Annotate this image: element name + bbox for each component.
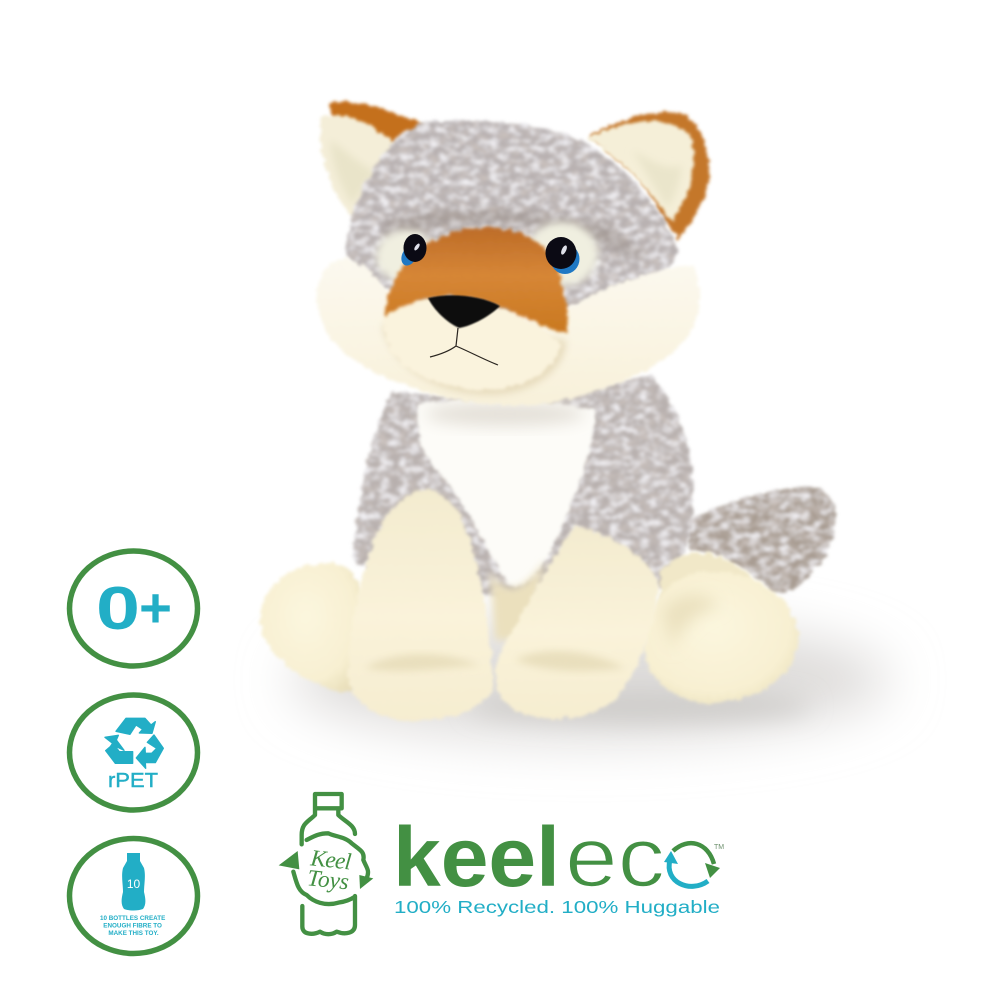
tail: [688, 487, 836, 593]
badge ring: [70, 838, 198, 954]
icon: recycled bottle: [279, 794, 373, 934]
left highlight: [413, 243, 421, 251]
right pupil: [546, 237, 576, 269]
eye patches: [376, 222, 598, 286]
badge: rPET: [70, 695, 198, 810]
muzzle cream: [384, 298, 560, 390]
badge ring: [70, 551, 198, 666]
left eye: [398, 234, 426, 268]
age digit: 0: [96, 575, 140, 642]
body: [352, 375, 693, 600]
ear left: [320, 102, 430, 218]
bottle outline: [293, 794, 368, 934]
tagline: 100% Recycled. 100% Huggable: [394, 897, 720, 917]
ear right: [588, 112, 709, 240]
ear right inner shade: [632, 150, 682, 208]
wordmark ec: ec: [565, 810, 665, 904]
green arc: [673, 843, 714, 864]
bottle caption: 10 BOTTLES CREATE: [100, 915, 165, 922]
blue arc: [669, 860, 708, 886]
ear right back: [590, 112, 709, 240]
ear left front: [320, 115, 404, 218]
badge: ten bottles: [70, 838, 198, 954]
cheeks: [317, 258, 700, 405]
right iris: [550, 244, 580, 274]
right highlight: [560, 245, 568, 255]
right eye patch: [526, 222, 598, 286]
nose: [428, 295, 500, 328]
right haunch: [660, 553, 760, 660]
back foot right: [644, 572, 798, 703]
right arrowhead: [359, 875, 373, 889]
left arrowhead: [279, 851, 299, 869]
mouth: [430, 328, 498, 365]
Keel script: Keel: [308, 845, 353, 875]
right eye: [546, 237, 580, 274]
left iris: [398, 244, 420, 268]
ear left back: [328, 102, 430, 170]
wordmark keel: keel: [393, 810, 560, 904]
left eye patch: [376, 230, 436, 282]
icon: recycling arrows: [105, 718, 163, 768]
icon: bottle: [122, 853, 145, 910]
chest shade under chin: [425, 402, 585, 426]
toe shade right: [515, 651, 625, 671]
centre shadow between legs: [490, 560, 545, 640]
badge ring: [70, 695, 198, 810]
bottle caption: ENOUGH FIBRE TO: [103, 922, 162, 930]
ear left inner shade: [330, 140, 376, 205]
toe shade left: [365, 654, 480, 671]
rPET label: rPET: [108, 770, 158, 792]
blue arrowhead: [664, 851, 678, 864]
badge: age 0+: [70, 551, 198, 666]
front leg right: [496, 525, 658, 718]
green arrowhead: [705, 863, 720, 878]
back foot left: [260, 563, 362, 692]
brow shading: [385, 210, 650, 262]
plush wolf toy: [260, 102, 836, 721]
muzzle shadow: [382, 325, 566, 394]
ear right front: [588, 121, 694, 222]
bottle number: 10: [127, 877, 140, 891]
plus sign: +: [139, 576, 172, 639]
wordmark o as recycling loop: [664, 843, 720, 886]
ground shadow: [290, 620, 890, 740]
trademark: TM: [714, 844, 724, 851]
foot shade right: [662, 594, 720, 650]
bottle caption: MAKE THIS TOY.: [108, 930, 159, 937]
keeleco logo: [279, 794, 724, 934]
chest: [417, 399, 596, 586]
Toys script: Toys: [306, 865, 350, 895]
front leg left: [348, 490, 493, 721]
muzzle orange: [384, 227, 568, 334]
head top: [345, 120, 678, 310]
left pupil: [404, 234, 426, 262]
